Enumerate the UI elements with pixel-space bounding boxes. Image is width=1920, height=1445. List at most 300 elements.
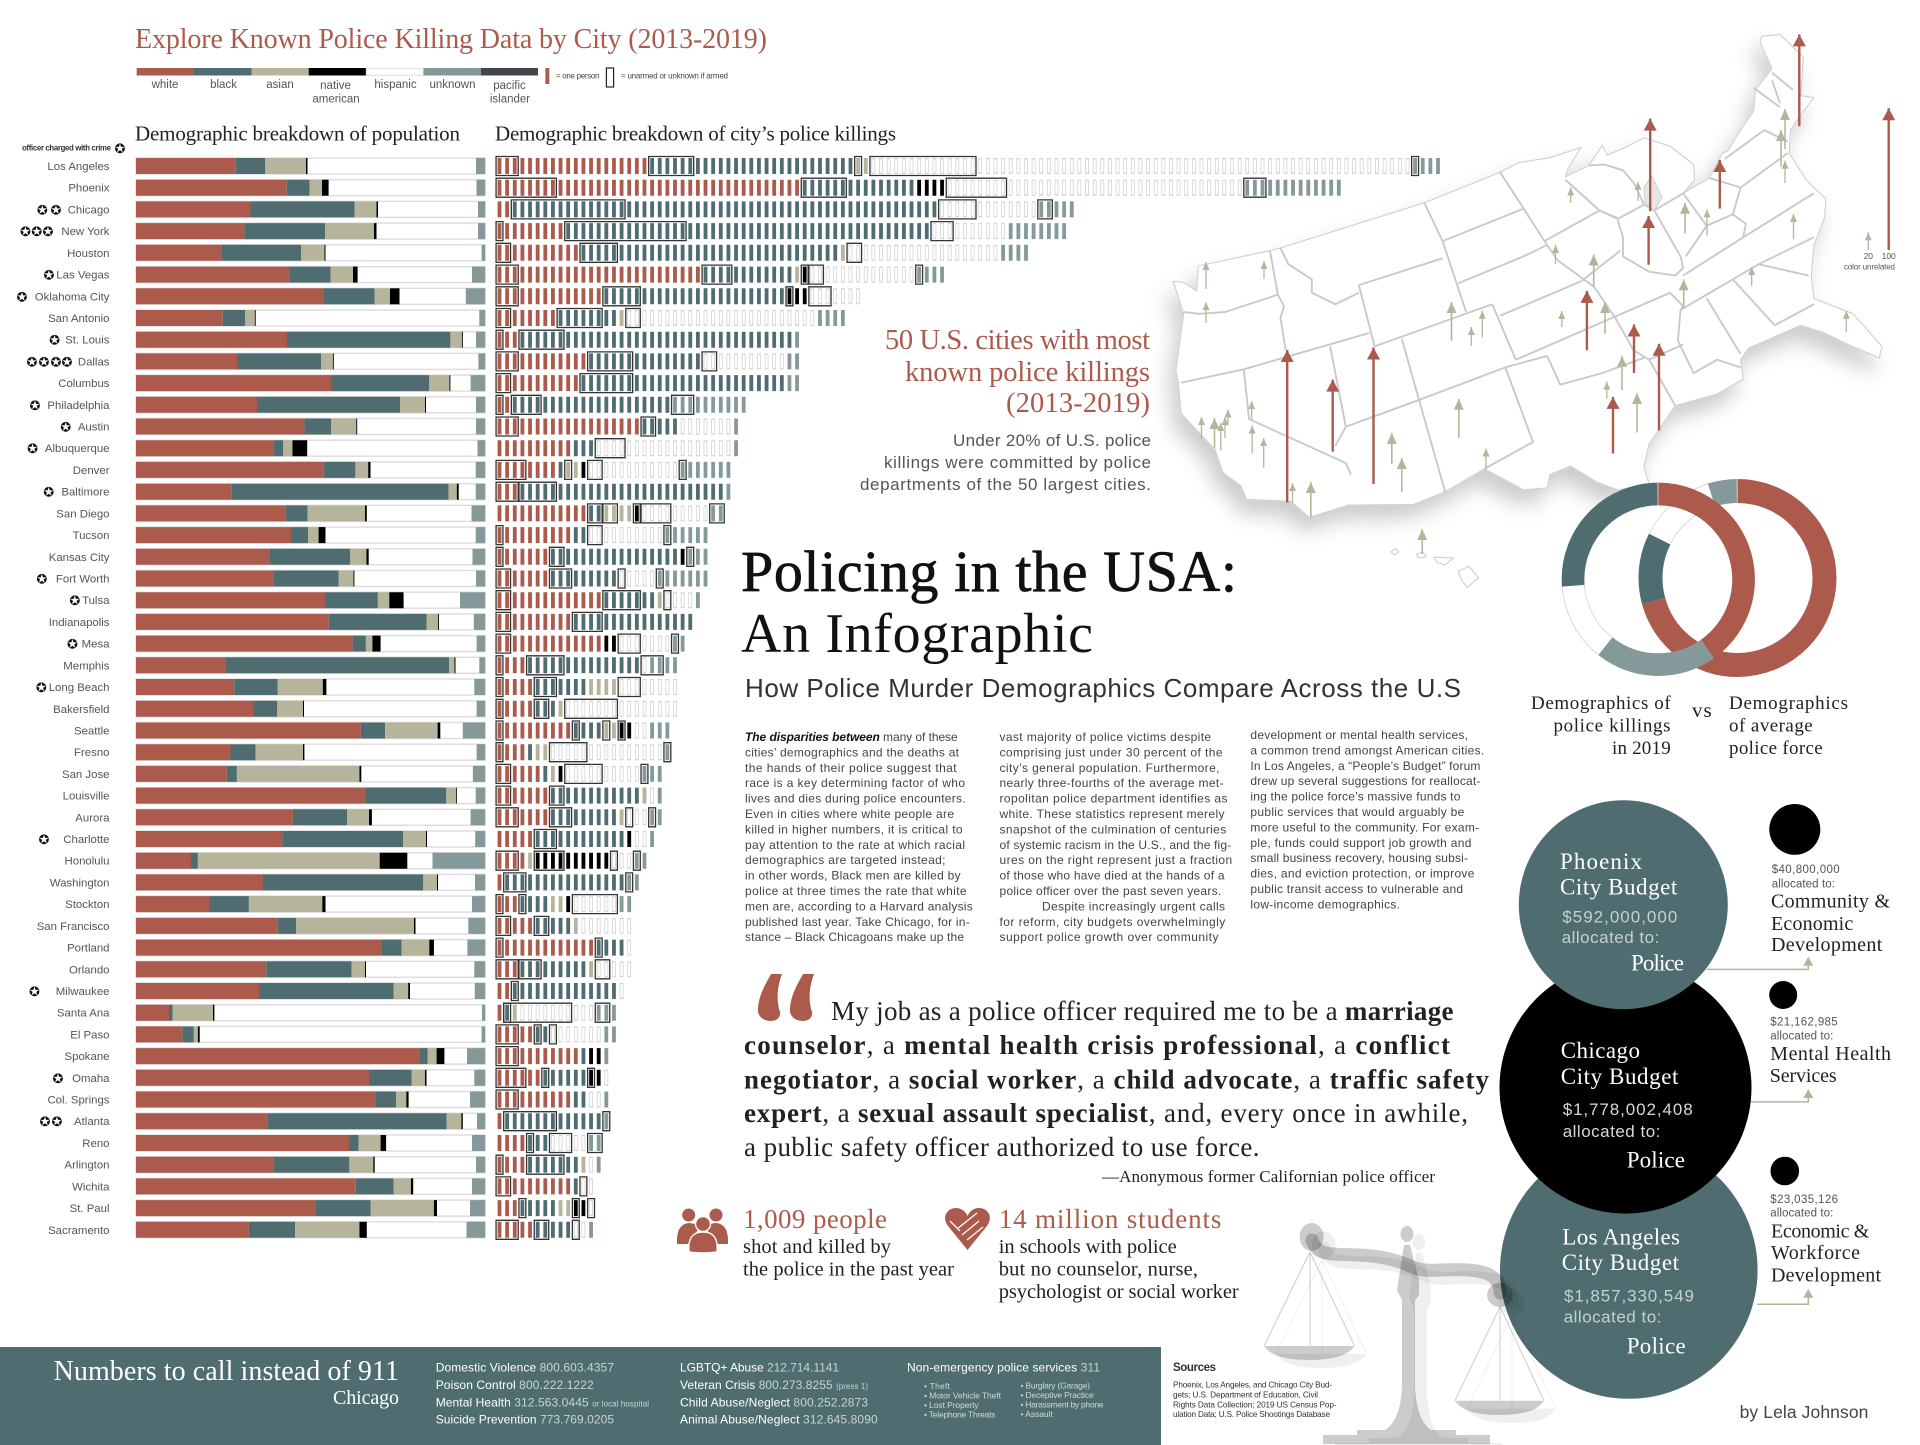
bar: San Antonio — [136, 310, 485, 326]
bar: Santa Ana — [136, 1005, 485, 1021]
column 2: city’s general population. Furthermore, — [1000, 761, 1220, 775]
non-emergency police services: • Assault — [1020, 1409, 1053, 1419]
arrow — [1633, 324, 1635, 373]
label: Honolulu: Honolulu — [65, 856, 110, 868]
legend: white — [151, 79, 178, 91]
ticks: Oklahoma City — [496, 287, 864, 306]
ticks: Bakersfield — [496, 699, 681, 718]
arrow — [1331, 380, 1334, 452]
bar: Chicago — [136, 201, 485, 217]
label: Atlanta: Atlanta — [74, 1116, 110, 1128]
column 3: small business recovery, housing subsi- — [1250, 851, 1468, 865]
stat: 14 million students: in schools with police — [999, 1236, 1177, 1258]
label: Tulsa: Tulsa — [82, 595, 110, 607]
label: Bakersfield: Bakersfield — [53, 704, 110, 716]
label: Baltimore — [43, 486, 110, 501]
label: Tucson: Tucson — [73, 530, 110, 542]
ticks: Indianapolis — [496, 612, 696, 631]
label: Chicago: ✪ — [51, 203, 62, 218]
column 2: snapshot of the culmination of centuries — [1000, 822, 1226, 836]
stat: 1,009 people: the police in the past year — [743, 1259, 954, 1281]
label: Omaha: ✪ — [52, 1072, 63, 1087]
bar: Oklahoma City — [136, 288, 485, 304]
bar: Arlington — [136, 1157, 485, 1173]
ticks: Houston — [496, 243, 1032, 262]
bar: Long Beach — [136, 679, 485, 695]
legend: pacific — [493, 80, 526, 92]
ticks: Wichita — [496, 1177, 597, 1196]
stat: 14 million students: 14 million students — [999, 1204, 1221, 1234]
city labels — [17, 161, 110, 1237]
footer heading: Numbers to call instead of 911 — [54, 1356, 399, 1387]
main title — [741, 539, 1237, 665]
label: Stockton: Stockton — [65, 899, 110, 911]
ticks: San Diego — [498, 504, 726, 523]
ticks: Orlando — [496, 960, 635, 979]
label: Oklahoma City: Oklahoma City — [35, 291, 110, 303]
allocation: Economic and Workforce Development: Economic & — [1771, 1221, 1870, 1243]
label: Philadelphia: ✪ — [30, 399, 41, 414]
bar: St. Paul — [136, 1200, 485, 1216]
column 2: support police growth over community — [1000, 930, 1218, 944]
ticks: Aurora — [496, 808, 665, 827]
ticks: Stockton — [496, 895, 635, 914]
label: Austin — [60, 420, 110, 436]
arrows: tan, killings per city — [1202, 109, 1846, 554]
column 2: vast majority of police victims despite — [1000, 730, 1211, 744]
ticks: Honolulu — [496, 851, 650, 870]
bar: Tulsa — [136, 592, 485, 608]
arrow — [1751, 267, 1753, 286]
bar: Los Angeles — [136, 158, 485, 174]
non-emergency police services: • Deceptive Practice — [1020, 1390, 1094, 1400]
stat: 14 million students: psychologist or social worker — [999, 1281, 1239, 1303]
label: Dallas: ✪ — [39, 355, 50, 370]
bar: Reno — [136, 1135, 485, 1151]
bar: Denver — [136, 462, 485, 478]
legend: american — [312, 94, 360, 106]
allocation: Community and Economic Development: allocated to: — [1772, 878, 1835, 890]
connector arrow: Chicago — [1751, 1089, 1813, 1102]
label: Austin: Austin — [78, 422, 110, 434]
legend — [137, 68, 728, 106]
pull quote: My job as a police officer required me to be a marriage — [831, 996, 1454, 1026]
label: Dallas: ✪ — [27, 355, 38, 370]
non-emergency police services: Non-emergency police services 311 — [907, 1361, 1100, 1375]
bar: Stockton — [136, 896, 485, 912]
label: New York: ✪ — [20, 225, 31, 240]
label: Austin: ✪ — [60, 420, 71, 436]
footer band — [0, 1347, 1161, 1445]
bar: Seattle — [136, 722, 485, 738]
label: Tulsa — [69, 594, 110, 609]
ticks: Albuquerque — [498, 439, 742, 458]
quote mark — [758, 974, 814, 1021]
legend: hispanic — [374, 79, 417, 91]
non-emergency police services: • Theft — [924, 1381, 951, 1391]
bar: Las Vegas — [136, 267, 485, 283]
ticks: Fort Worth — [496, 569, 711, 588]
label: Denver: Denver — [73, 465, 110, 477]
ticks: Kansas City — [496, 547, 711, 566]
hotline numbers, column 1 — [436, 1361, 649, 1427]
label: Spokane: Spokane — [65, 1051, 110, 1063]
bar: Spokane — [136, 1048, 485, 1064]
label: Chicago — [37, 203, 109, 218]
arrows: red, cities with most killings — [1287, 34, 1799, 503]
column 1: The disparities between many of these — [745, 730, 958, 744]
label: Charlotte — [39, 833, 110, 848]
arrow — [1612, 397, 1614, 454]
icon: scales of justice — [1264, 1223, 1556, 1445]
allocation: Economic and Workforce Development: Development — [1771, 1264, 1881, 1286]
hotline numbers, column 2: LGBTQ+ Abuse 212.714.1141 — [680, 1361, 839, 1375]
label: Albuquerque: Albuquerque — [45, 443, 110, 455]
column 3: public transit access to vulnerable and — [1250, 882, 1463, 896]
arrow — [1205, 302, 1207, 323]
allocation: Mental Health Services — [1769, 981, 1891, 1087]
pull quote: a public safety officer authorized to use force. — [744, 1132, 1260, 1162]
ticks: Baltimore — [496, 482, 734, 501]
main title: Policing in the USA: — [741, 539, 1237, 604]
sources: Phoenix, Los Angeles, and Chicago City Bud- — [1173, 1381, 1332, 1390]
officer charged legend — [22, 142, 126, 157]
label: Dallas: ✪ — [51, 355, 62, 370]
legend: native — [320, 80, 351, 92]
non-emergency police services: • Burglary (Garage) — [1020, 1381, 1090, 1391]
ticks: San Jose — [496, 764, 665, 783]
bar: Austin — [136, 418, 485, 434]
bar: Houston — [136, 245, 485, 261]
sources: Sources — [1173, 1362, 1216, 1374]
label: Orlando: Orlando — [69, 964, 110, 976]
label: Kansas City: Kansas City — [49, 552, 110, 564]
sources — [1173, 1362, 1337, 1419]
hotline numbers, column 2: Child Abuse/Neglect 800.252.2873 — [680, 1395, 868, 1409]
budget circle: Phoenix: Phoenix — [1560, 849, 1642, 874]
label: Fresno: Fresno — [74, 747, 110, 759]
label: Chicago: ✪ — [37, 203, 48, 218]
column 3: dies, and eviction protection, or improve — [1250, 867, 1475, 881]
label: Indianapolis: Indianapolis — [49, 617, 110, 629]
arrow scale legend: 100 — [1882, 251, 1896, 261]
hotline numbers, column 2 — [680, 1361, 878, 1427]
arrow — [1649, 119, 1651, 211]
arrow — [1485, 448, 1487, 469]
pull quote: counselor, a mental health crisis professional, a conflict — [744, 1030, 1450, 1060]
allocation: Community and Economic Development: Economic — [1771, 913, 1853, 935]
label: Chicago: Chicago — [68, 204, 110, 216]
label: Oklahoma City — [17, 290, 110, 305]
budget circle: Phoenix: Police — [1631, 950, 1684, 976]
arrow — [1251, 401, 1253, 419]
hotline numbers, column 1: Suicide Prevention 773.769.0205 — [436, 1413, 614, 1427]
text: under 20%: departments of the 50 largest cities. — [860, 475, 1151, 494]
column 1: police at three times the rate that white — [745, 884, 967, 898]
arrow — [1310, 482, 1312, 517]
ticks: Los Angeles — [496, 156, 1444, 176]
column 3: ple, funds could support job growth and — [1250, 836, 1471, 850]
arrow — [1470, 327, 1472, 346]
arrow — [1224, 417, 1226, 438]
label: Columbus: Columbus — [58, 378, 110, 390]
column 2: of systemic racism in the U.S., and the fig- — [1000, 838, 1231, 852]
heading: 50 U.S. cities: (2013-2019) — [1006, 388, 1150, 419]
label: Los Angeles: Los Angeles — [47, 161, 110, 173]
ticks: Atlanta — [498, 1112, 612, 1131]
label: Charlotte: ✪ — [39, 833, 50, 848]
column 3: low-income demographics. — [1250, 897, 1400, 911]
arrow — [1606, 382, 1608, 399]
allocation: Mental Health Services: $21,162,985 — [1770, 1016, 1838, 1028]
arrow — [1637, 182, 1639, 201]
bar: Col. Springs — [136, 1092, 485, 1108]
label: Philadelphia — [30, 399, 110, 414]
pull quote: expert, a sexual assault specialist, and, every once in awhile, — [744, 1098, 1468, 1128]
legend: asian — [266, 79, 294, 91]
ticks: Sacramento — [496, 1220, 597, 1239]
non-emergency police services: • Lost Property — [924, 1400, 979, 1410]
arrow — [1205, 262, 1207, 289]
label: Milwaukee: ✪ — [29, 985, 40, 1000]
allocation: Economic and Workforce Development: $23,035,126 — [1770, 1194, 1838, 1206]
donut captions: police force — [1729, 738, 1823, 759]
arrow — [1604, 302, 1606, 334]
non-emergency police services — [907, 1361, 1104, 1420]
label: Omaha: Omaha — [72, 1073, 110, 1085]
label: Baltimore: ✪ — [43, 486, 54, 501]
sources: Rights Data Collection; 2019 US Census Pop- — [1173, 1400, 1337, 1409]
allocation: Mental Health Services: Mental Health — [1770, 1043, 1891, 1065]
bar: Indianapolis — [136, 614, 485, 630]
label: San Jose: San Jose — [62, 769, 110, 781]
hotline numbers, column 1: Mental Health 312.563.0445 or local hospital — [436, 1395, 649, 1409]
budget circle: Phoenix: allocated to: — [1562, 928, 1659, 947]
arrow — [1263, 261, 1265, 279]
column 2: comprising just under 30 percent of the — [1000, 745, 1223, 759]
arrow — [1792, 214, 1794, 239]
arrow — [1561, 311, 1563, 327]
label: Atlanta: ✪ — [40, 1115, 51, 1130]
arrow — [1263, 438, 1265, 468]
bar: St. Louis — [136, 332, 485, 348]
budget circle: Chicago — [1500, 962, 1752, 1214]
label: Sacramento: Sacramento — [48, 1225, 110, 1237]
budget circle: Phoenix: $592,000,000 — [1562, 907, 1677, 926]
title: Explore Known Police Killing Data by City (2013-2019) — [135, 24, 767, 55]
arrow — [1684, 203, 1686, 233]
pull quote: negotiator, a social worker, a child advocate, a traffic safety — [744, 1064, 1490, 1094]
donut captions: of average — [1729, 716, 1813, 737]
bar: Albuquerque — [136, 440, 485, 456]
ticks: Portland — [496, 938, 635, 957]
allocation: Community and Economic Development — [1769, 804, 1890, 956]
allocation: Community and Economic Development: Community & — [1771, 891, 1890, 913]
label: Dallas — [27, 355, 110, 370]
text: under 20% — [860, 431, 1151, 494]
legend: = one person — [556, 72, 600, 80]
label: Atlanta — [40, 1115, 110, 1130]
officer charged legend: ✪ — [115, 142, 126, 157]
label: St. Paul: St. Paul — [70, 1203, 110, 1215]
ticks: Las Vegas — [496, 265, 948, 284]
donut captions: vs — [1692, 698, 1712, 722]
label: Long Beach: ✪ — [36, 681, 47, 696]
label: Aurora: Aurora — [75, 812, 110, 824]
column 1: men are, according to a Harvard analysis — [745, 899, 973, 913]
legend: = unarmed or unknown if armed — [621, 72, 728, 80]
donut captions — [1531, 693, 1848, 759]
subtitle: How Police Murder Demographics Compare Across the U.S — [745, 673, 1461, 703]
bar: Fort Worth — [136, 570, 485, 586]
heading: population: Demographic breakdown of population — [135, 122, 460, 146]
bar: Aurora — [136, 809, 485, 825]
label: Wichita: Wichita — [72, 1181, 110, 1193]
allocation: Economic and Workforce Development — [1770, 1157, 1881, 1286]
allocation: Economic and Workforce Development: allocated to: — [1770, 1208, 1833, 1220]
budget circle: Los Angeles — [1500, 1141, 1758, 1399]
donut captions: Demographics — [1729, 693, 1848, 714]
label: San Diego: San Diego — [56, 508, 110, 520]
non-emergency police services: • Motor Vehicle Theft — [924, 1391, 1002, 1401]
label: New York: New York — [61, 226, 110, 238]
budget circle: Chicago: City Budget — [1561, 1064, 1679, 1089]
ticks: Fresno — [496, 743, 673, 762]
text: under 20%: killings were committed by police — [884, 453, 1151, 472]
budget circle: Chicago: allocated to: — [1563, 1122, 1660, 1141]
article body text — [745, 728, 1484, 944]
bar: Phoenix — [136, 180, 485, 196]
connector arrow: Los Angeles — [1757, 1289, 1813, 1304]
label: Arlington: Arlington — [65, 1160, 110, 1172]
arrow — [1200, 417, 1202, 439]
column 2: white. These statistics represent merely — [998, 807, 1224, 821]
icon: heart with handshake — [945, 1208, 990, 1250]
label: San Antonio: San Antonio — [48, 313, 110, 325]
bar: San Diego — [136, 505, 485, 521]
label: Mesa — [67, 638, 110, 653]
column 1: killed in higher numbers, it is critical to — [745, 822, 963, 836]
arrow — [1227, 410, 1229, 426]
stat: 14 million students — [999, 1204, 1239, 1303]
bar: Philadelphia — [136, 397, 485, 413]
hotline numbers, column 1: Domestic Violence 800.603.4357 — [436, 1361, 614, 1375]
bar: Washington — [136, 874, 485, 890]
arrow — [1658, 344, 1660, 430]
column 1: in other words, Black men are killed by — [745, 869, 961, 883]
allocation: Economic and Workforce Development: Workforce — [1771, 1242, 1860, 1264]
column 1 — [745, 730, 973, 944]
ticks: Tulsa — [496, 591, 704, 610]
bar: Atlanta — [136, 1113, 485, 1129]
bar: Portland — [136, 940, 485, 956]
ticks: Dallas — [496, 352, 803, 371]
label: St. Louis: ✪ — [49, 334, 60, 349]
arrow scale legend: color unrelated — [1844, 262, 1895, 272]
ticks: Long Beach — [496, 678, 681, 696]
label: Las Vegas: ✪ — [44, 269, 55, 284]
arrow — [1586, 291, 1588, 350]
arrow — [1798, 34, 1801, 126]
label: Dallas: Dallas — [78, 356, 110, 368]
ticks: Omaha — [496, 1068, 612, 1087]
column 1: stance – Black Chicagoans make up the — [745, 930, 964, 944]
ticks: Charlotte — [498, 830, 658, 848]
bar: New York — [136, 223, 485, 239]
column 2: ropolitan police department identifies as — [1000, 792, 1228, 806]
column 2: Despite increasingly urgent calls — [1042, 899, 1225, 913]
pull quote — [744, 996, 1490, 1186]
label: Baltimore: Baltimore — [61, 487, 110, 499]
label: Fort Worth: ✪ — [36, 572, 47, 588]
arrow — [1784, 161, 1786, 183]
ticks: Col. Springs — [496, 1090, 612, 1109]
arrow — [1292, 483, 1294, 502]
ticks: Columbus — [496, 374, 803, 393]
bar: Memphis — [136, 657, 485, 673]
ticks: St. Louis — [496, 330, 803, 349]
ticks: El Paso — [496, 1025, 620, 1044]
label: Tulsa: ✪ — [69, 594, 80, 609]
bar: Dallas — [136, 353, 485, 369]
hotline numbers, column 2: Veteran Crisis 800.273.8255 (press 1) — [680, 1378, 868, 1392]
heading: 50 U.S. cities: known police killings — [905, 357, 1150, 388]
column 3: ing the police force’s massive funds to — [1250, 790, 1461, 804]
sources: ulation Data; U.S. Police Shootings Database — [1173, 1410, 1330, 1419]
label: New York — [20, 225, 110, 240]
arrow — [1706, 209, 1708, 235]
bar: Columbus — [136, 375, 485, 391]
arrow — [1421, 529, 1423, 554]
arrow — [1784, 109, 1786, 149]
text: under 20%: Under 20% of U.S. police — [953, 431, 1151, 450]
ticks: Phoenix — [496, 178, 1345, 197]
column 2 — [998, 730, 1232, 944]
ticks: Chicago — [498, 200, 1077, 219]
sources: gets; U.S. Department of Education, Civil — [1173, 1390, 1318, 1399]
label: Dallas: ✪ — [62, 355, 73, 370]
bar: El Paso — [136, 1026, 485, 1042]
budget circle: Los Angeles: City Budget — [1562, 1250, 1680, 1275]
ticks: Milwaukee — [498, 982, 627, 1000]
donut captions: in 2019 — [1612, 738, 1671, 759]
budget circle: Los Angeles: allocated to: — [1564, 1308, 1661, 1327]
arrow — [1845, 311, 1847, 332]
ticks: Tucson — [496, 526, 711, 545]
column 3: development or mental health services, — [1250, 728, 1468, 742]
arrow — [1214, 418, 1216, 448]
column 1: published last year. Take Chicago, for in- — [745, 915, 970, 929]
bar: Baltimore — [136, 484, 485, 500]
label: New York: ✪ — [43, 225, 54, 240]
non-emergency police services: • Harassment by phone — [1020, 1400, 1104, 1410]
tick chart: police killings by demographic — [496, 156, 1444, 1239]
budget circle: Los Angeles: $1,857,330,549 — [1564, 1287, 1694, 1306]
arrow — [1481, 311, 1483, 338]
bar: Fresno — [136, 744, 485, 760]
budget circle: Los Angeles: Police — [1627, 1333, 1686, 1358]
bar: Louisville — [136, 788, 485, 804]
budget circle: Phoenix — [1519, 800, 1728, 1009]
credit: by Lela Johnson — [1740, 1402, 1868, 1422]
bar: San Francisco — [136, 918, 485, 934]
ticks: Washington — [498, 873, 643, 892]
bar: Orlando — [136, 961, 485, 977]
legend: black — [210, 79, 237, 91]
label: Milwaukee — [29, 985, 110, 1000]
arrow — [1647, 216, 1650, 265]
arrow — [1719, 160, 1721, 209]
